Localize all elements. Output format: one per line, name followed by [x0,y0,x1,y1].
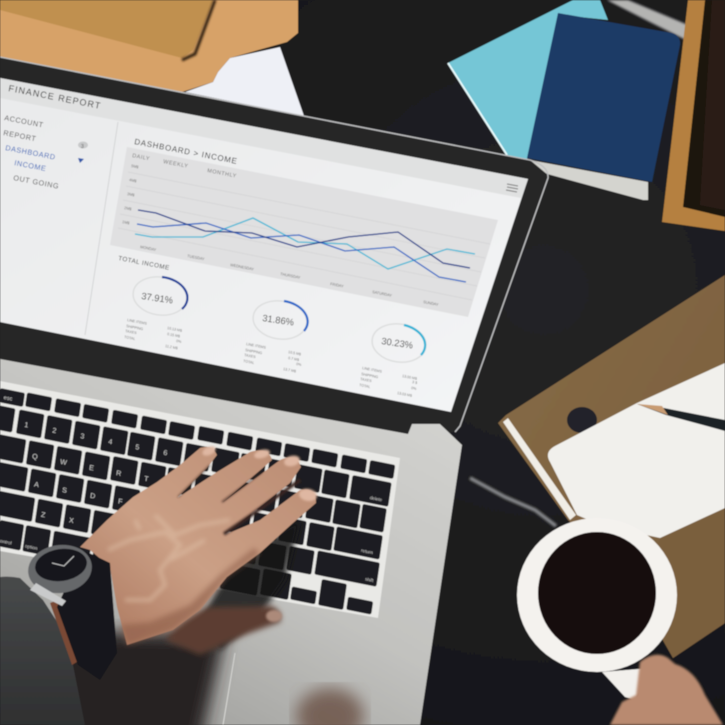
sidebar divider [85,122,118,335]
donut 37.91%: 10.13 M$ [167,326,182,333]
donut 30.23%: 13.00 M$ [402,374,417,381]
key labels: Z [41,511,47,520]
sidebar menu: OUT GOING [13,173,60,191]
wristwatch [25,541,117,680]
notebooks top right [448,0,680,200]
key labels [0,395,390,617]
series: light blue [135,218,475,269]
line chart: MONTHLY [207,168,237,180]
bezel rim [0,57,548,432]
series: navy [138,210,470,268]
display bezel [0,57,548,434]
title: finance report: FINANCE REPORT [8,83,102,111]
pencil [637,404,725,431]
line chart: WEDNESDAY [230,263,255,272]
watch lug and wrist sliver [50,600,80,665]
donut 31.86%: 31.86% [262,312,295,328]
line chart: SUNDAY [423,300,439,307]
donut 30.23%: TOTAL [359,383,371,389]
sweater sleeve [0,577,85,725]
folders top left [0,0,304,116]
finger shadow on keys [200,520,300,650]
hand on keyboard [40,444,318,725]
series: mid blue [137,223,466,282]
key labels: 1 [24,421,29,430]
line chart: MONDAY [140,245,157,252]
line chart: WEEKLY [163,159,189,170]
finger gaps [178,465,300,534]
lower shadow [40,630,225,725]
laptop [0,57,548,725]
heading: dashboard income: DASHBOARD > INCOME [134,137,238,166]
laptop deck [0,358,462,725]
screen [0,78,528,412]
sidebar menu: ACCOUNT [4,113,44,130]
line chart: DAILY [132,153,150,162]
donut 30.23%: TAXES [360,377,372,383]
donut 37.91%: TOTAL [124,335,136,341]
sidebar menu: REPORT [3,128,37,143]
donut 30.23%: 0% [411,386,417,391]
donut 31.86%: 0.7 M$ [288,356,299,362]
donut 37.91% [124,273,189,350]
key labels: 2 [52,426,57,435]
line chart: 3M$ [127,192,136,198]
line chart: 4M$ [129,178,138,184]
donut 30.23%: 3 $ [412,380,417,385]
key labels: 4 [108,438,113,446]
key labels: T [144,475,150,484]
key labels: esc [3,395,13,403]
key labels: 6 [163,449,168,457]
sidebar menu [3,113,88,191]
key labels: F [118,497,124,506]
donut 37.91%: 11.2 M$ [165,344,178,350]
donut 37.91%: 0% [176,339,182,344]
donut 31.86%: TAXES [244,353,256,359]
key labels: shift [365,576,374,583]
key labels: return [361,548,374,555]
donut 30.23% [359,320,428,398]
key labels: X [69,516,75,525]
hand holding cup [610,655,723,725]
trackpad edge [223,653,235,725]
donut 37.91%: SHIPPING [126,324,144,331]
donut 31.86%: 13.7 M$ [283,367,296,373]
donut 37.91%: 37.91% [141,290,174,306]
donut 30.23%: SHIPPING [361,372,379,379]
watch case [25,541,95,597]
key labels: S [62,486,68,495]
donut 30.23%: 30.23% [381,335,414,351]
key labels: 5 [135,443,140,452]
line chart: THURSDAY [280,272,301,280]
veins [108,515,230,600]
donut 31.86%: 10.5 M$ [288,350,301,356]
key labels: R [116,469,122,478]
line chart: SATURDAY [372,290,393,298]
thumb [165,606,281,655]
key labels: option [25,543,38,551]
key labels: delete [370,495,383,503]
brown folder and notebook [498,275,725,658]
keys [0,380,395,621]
sidebar menu: DASHBOARD [5,143,56,162]
key labels: A [34,480,40,489]
blurred hand bottom [296,688,364,725]
key labels: W [60,458,68,467]
hand lower shading [120,548,260,645]
desk marble veins [470,0,688,526]
donut 37.91%: LINE ITEMS [127,318,148,326]
key labels: 3 [80,432,85,441]
keyboard [0,380,395,621]
donut 37.91%: 0.15 M$ [167,332,180,338]
donut 37.91%: TAXES [125,329,137,335]
sidebar menu: INCOME [14,158,47,173]
keyboard well [0,381,400,618]
donut 30.23%: 13.03 M$ [397,391,412,398]
line chart [110,147,498,317]
donut 31.86%: 0% [296,362,302,367]
wooden tray [662,0,725,231]
key labels: Q [32,452,39,461]
key labels: E [89,464,95,473]
key labels: D [90,492,96,501]
hamburger icon [506,184,518,192]
coffee cup [517,518,677,700]
fingernails [201,444,318,502]
donut 31.86%: SHIPPING [245,348,263,355]
screen header bar [0,78,528,198]
donut 30.23%: LINE ITEMS [362,366,383,374]
line chart: 5M$ [131,164,140,170]
line chart: FRIDAY [330,282,344,289]
line chart: TUESDAY [187,254,205,261]
sidebar menu: 3 [81,144,84,150]
heading: total income: TOTAL INCOME [118,255,170,272]
donut 31.86%: LINE ITEMS [246,342,267,350]
donut 31.86%: TOTAL [243,359,255,365]
line chart: 2M$ [124,206,133,212]
donut 31.86% [243,297,309,373]
line chart: 1M$ [122,220,131,226]
back of hand and fingers [80,447,316,645]
watch face [33,546,89,584]
watch strap [57,550,117,680]
